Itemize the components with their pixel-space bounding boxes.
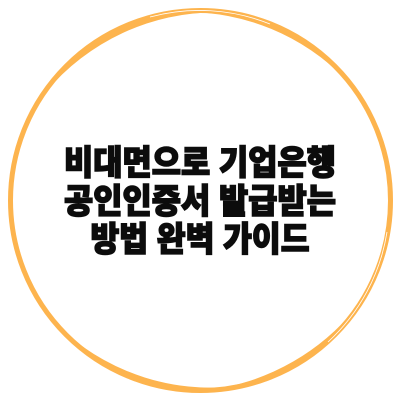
title line 3: 방법 완벽 가이드 [90, 221, 310, 259]
title [64, 144, 336, 259]
title line 1: 비대면으로 기업은행 [64, 144, 336, 182]
title line 2: 공인인증서 발급받는 [64, 183, 336, 221]
